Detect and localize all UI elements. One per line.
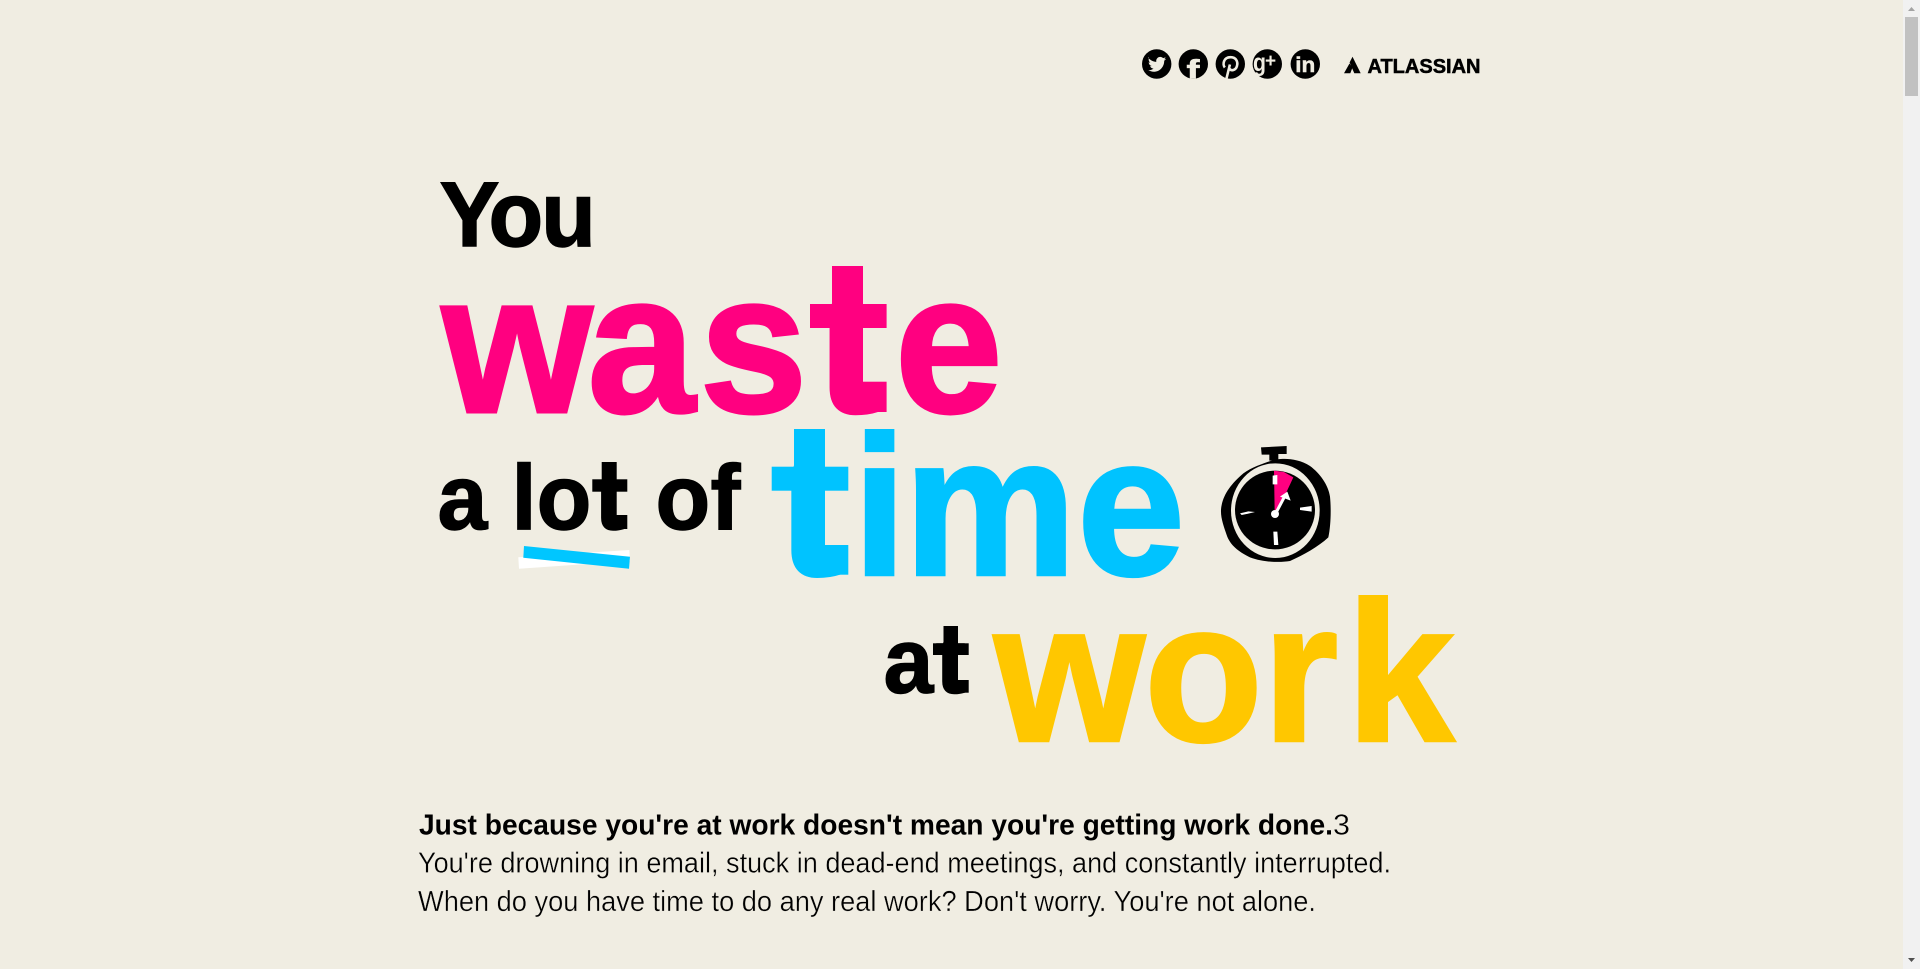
icon: facebook: f — [1186, 53, 1200, 88]
atlassian logo: ATLASSIAN — [1368, 56, 1480, 78]
social icons row — [1142, 49, 1320, 79]
icon: pinterest — [1216, 49, 1245, 79]
intro line 2: You're drowning in email, stuck in dead-end meetings, and constantly interrupted. — [418, 848, 1391, 880]
intro bold line: Just because you're at work doesn't mean you're getting work done. — [419, 809, 1333, 841]
icon: twitter — [1142, 49, 1171, 79]
icon: stopwatch — [1221, 446, 1331, 562]
underline under lot — [518, 546, 630, 569]
title — [438, 164, 1455, 783]
title word: at: at — [884, 610, 966, 713]
intro line 3: When do you have time to do any real work? Don't worry. You're not alone. — [418, 886, 1316, 918]
icon: facebook — [1178, 49, 1208, 79]
title words: a lot of: a lot of — [438, 447, 741, 549]
icon: linkedin: in — [1295, 54, 1315, 77]
browser scrollbar — [1903, 0, 1920, 969]
icon: google plus: + — [1265, 51, 1276, 72]
title word: time: time — [777, 394, 1185, 617]
icon: linkedin — [1291, 49, 1320, 79]
title word: You: You — [440, 164, 596, 266]
icon: google plus — [1253, 49, 1282, 79]
icon: atlassian mark — [1344, 57, 1361, 73]
title word: work: work — [993, 560, 1455, 783]
icon: google plus: g — [1253, 49, 1266, 77]
title word: waste: waste — [441, 232, 1003, 455]
intro bold line: 3 — [1333, 809, 1350, 841]
intro paragraph — [418, 809, 1391, 918]
